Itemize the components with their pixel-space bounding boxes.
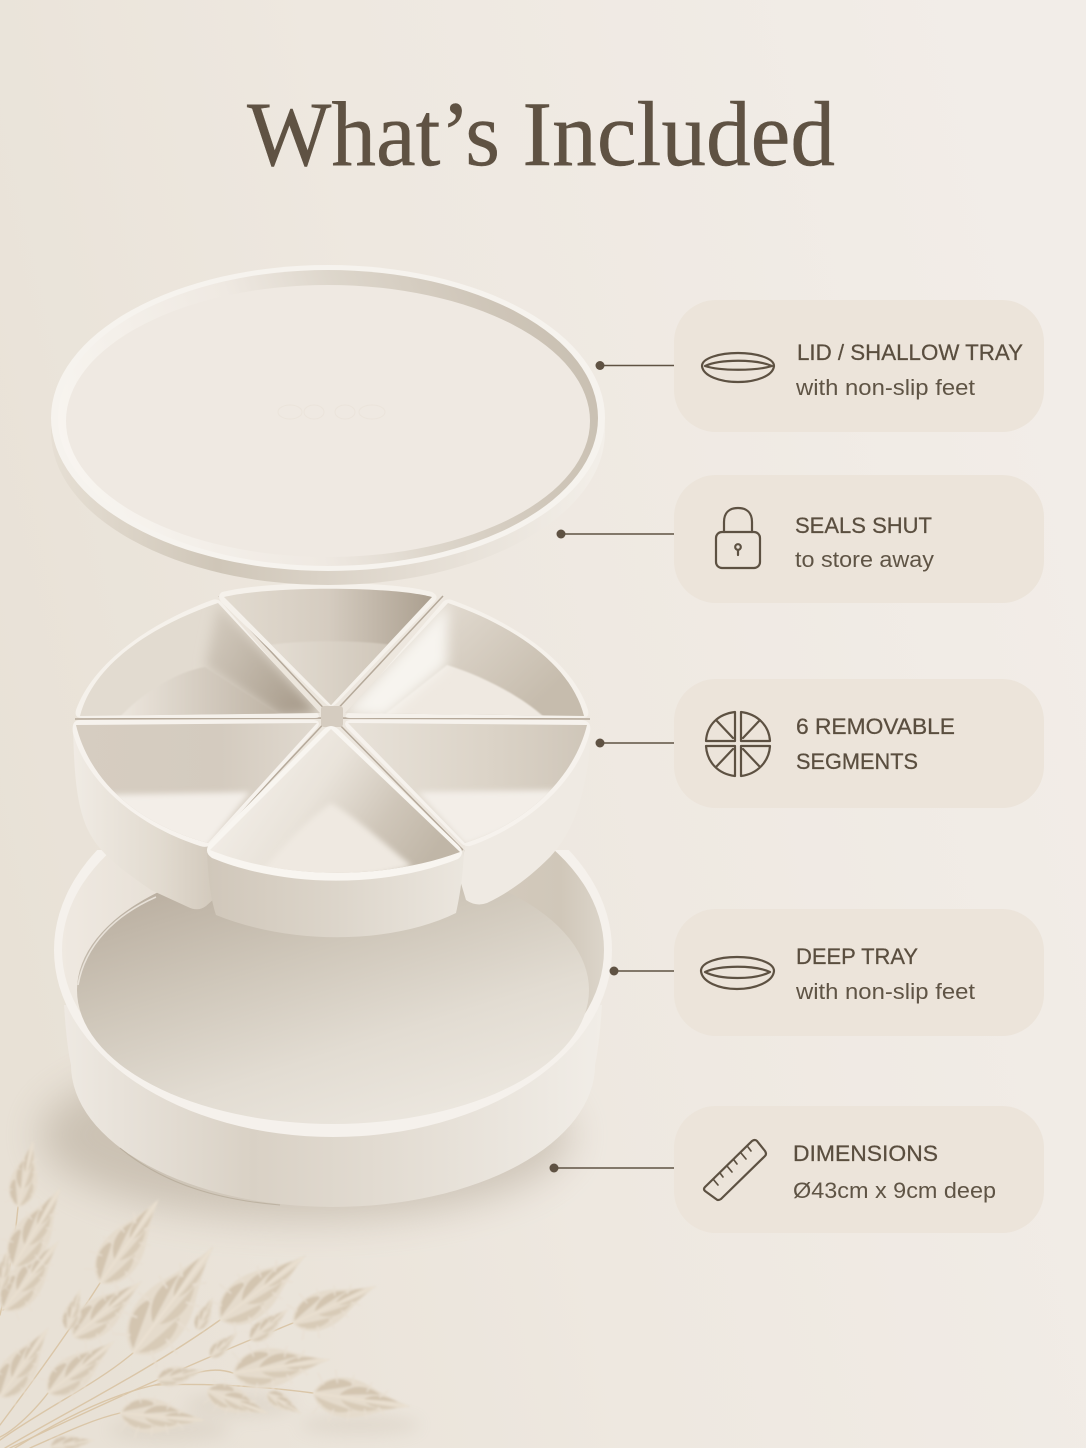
subtext: with non-slip feet bbox=[795, 979, 975, 1004]
heading: SEALS SHUT bbox=[795, 513, 932, 538]
bottom segment bbox=[207, 726, 462, 881]
top-left segment bbox=[76, 599, 320, 718]
icon: deep dish bbox=[701, 957, 774, 989]
subtext: Ø43cm x 9cm deep bbox=[793, 1178, 996, 1203]
pill bbox=[674, 300, 1044, 432]
bottom-left segment wall bbox=[73, 725, 216, 909]
segment gaps bbox=[75, 596, 590, 850]
wheat decoration bbox=[0, 1136, 420, 1448]
bottom-right segment wall bbox=[460, 725, 590, 904]
center post bbox=[321, 706, 343, 727]
heading: DIMENSIONS bbox=[793, 1141, 938, 1166]
deep tray inner wall bbox=[62, 850, 604, 1014]
top-right segment bbox=[345, 599, 588, 718]
lid flat surface bbox=[66, 285, 590, 557]
icon: ruler bbox=[704, 1140, 766, 1200]
lid side wall bbox=[51, 279, 605, 585]
product: deep tray bbox=[31, 850, 612, 1234]
callout: dimensions bbox=[550, 1106, 1044, 1233]
heading: LID / SHALLOW TRAY bbox=[797, 340, 1023, 365]
connector bbox=[596, 738, 675, 748]
pill bbox=[674, 475, 1044, 603]
deep tray base edge bbox=[120, 1148, 280, 1205]
callout: removable segments bbox=[596, 679, 1044, 808]
deep tray floor bbox=[77, 856, 589, 1124]
callout: seals shut bbox=[556, 475, 1044, 603]
lid inner step bbox=[58, 270, 598, 566]
wheat shadows bbox=[110, 1393, 420, 1442]
deep tray shadow bbox=[40, 1051, 570, 1219]
callout: deep tray bbox=[610, 909, 1044, 1036]
pill bbox=[674, 1106, 1044, 1233]
pill bbox=[674, 679, 1044, 808]
bottom segment wall bbox=[207, 850, 464, 937]
icon: padlock bbox=[716, 508, 760, 568]
embossed logo bbox=[278, 405, 385, 419]
subtext: SEGMENTS bbox=[796, 749, 918, 774]
connector bbox=[556, 530, 675, 538]
connector bbox=[610, 966, 675, 976]
deep tray outer wall bbox=[64, 1005, 602, 1207]
deep tray rim bbox=[54, 850, 612, 1137]
title: What’s Included bbox=[247, 83, 835, 185]
subtext: with non-slip feet bbox=[795, 375, 975, 400]
bottom-right segment bbox=[345, 720, 590, 846]
connector bbox=[596, 361, 675, 370]
heading: 6 REMOVABLE bbox=[796, 714, 955, 739]
top segment bbox=[219, 583, 437, 710]
wheat stems bbox=[0, 1207, 313, 1448]
heading: DEEP TRAY bbox=[796, 944, 918, 969]
product: removable segments bbox=[73, 583, 590, 937]
pill bbox=[674, 909, 1044, 1036]
connector bbox=[550, 1164, 675, 1172]
icon: segmented wheel bbox=[706, 712, 770, 776]
callout: lid / shallow tray bbox=[596, 300, 1044, 432]
lid rim bbox=[51, 265, 605, 571]
product: lid / shallow tray bbox=[51, 265, 605, 585]
bottom-left segment bbox=[73, 720, 319, 850]
subtext: to store away bbox=[795, 547, 934, 572]
wheat plumes bbox=[0, 1136, 415, 1448]
icon: shallow dish bbox=[702, 353, 774, 382]
